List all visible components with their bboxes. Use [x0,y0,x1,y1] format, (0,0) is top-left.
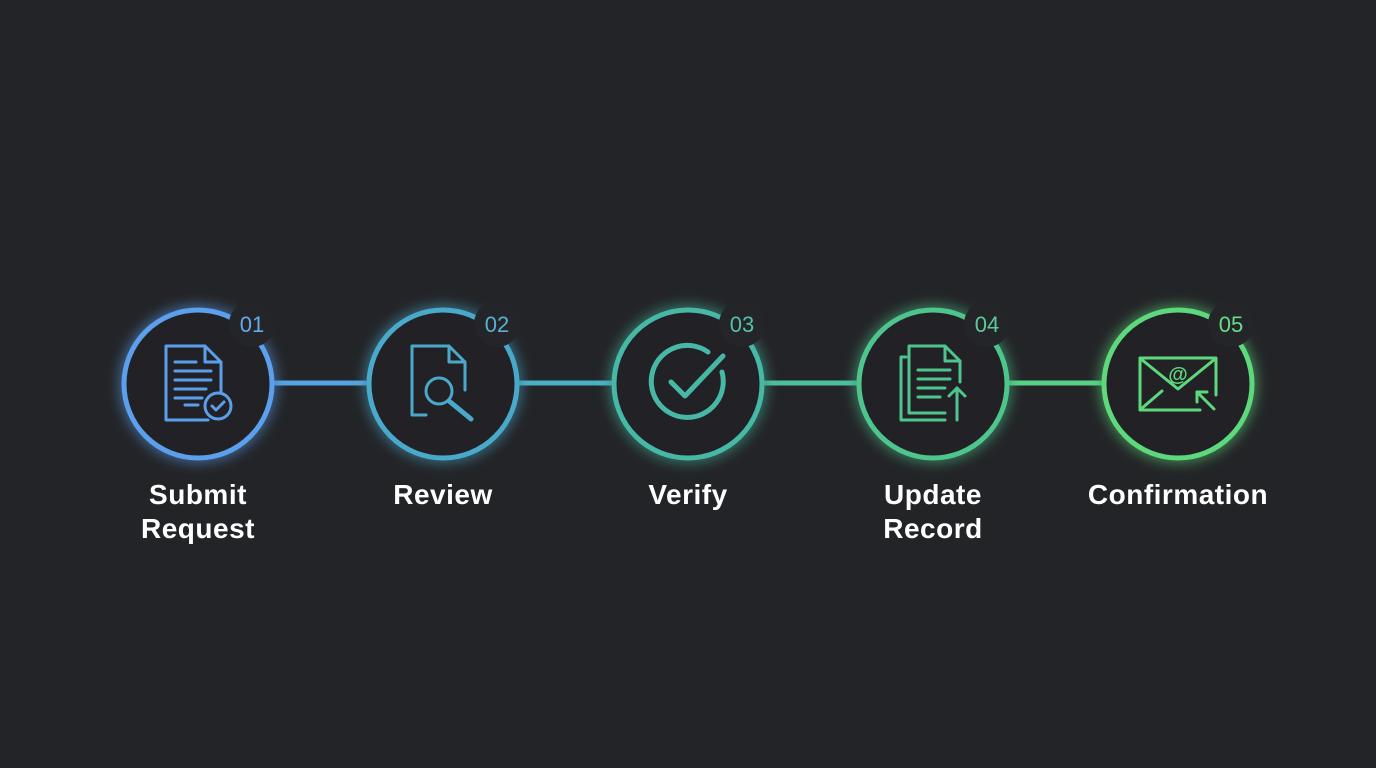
badge 02: 02 [485,312,509,337]
step 5: Confirmation [1088,301,1268,510]
step 4: Update Record [859,301,1010,544]
icon: check circle [651,345,723,417]
badge 04: 04 [975,312,999,337]
icon: documents with up arrow [901,346,965,420]
badge 05: 05 [1219,312,1243,337]
step 1: Submit Request [124,301,275,544]
connector lines [272,380,1104,386]
icon: document with magnifier [412,346,471,419]
label: Verify [648,479,728,510]
badge 03 [719,301,765,347]
badge 01: 01 [240,312,264,337]
badge 04 [964,301,1010,347]
step 5: Confirmation: @ [1168,364,1188,386]
label: Review [393,479,493,510]
step 2: Review [369,301,520,510]
label: Update [884,479,982,510]
badge 03: 03 [730,312,754,337]
label: Confirmation [1088,479,1268,510]
step 3: Verify [614,301,765,510]
badge 05 [1208,301,1254,347]
step 1: Submit Request: Request [141,513,255,544]
badge 02 [474,301,520,347]
icon: envelope with @ [1140,358,1216,410]
step 4: Update Record: Record [883,513,983,544]
badge 01 [229,301,275,347]
label: Submit [149,479,247,510]
icon: document with check [166,346,231,420]
